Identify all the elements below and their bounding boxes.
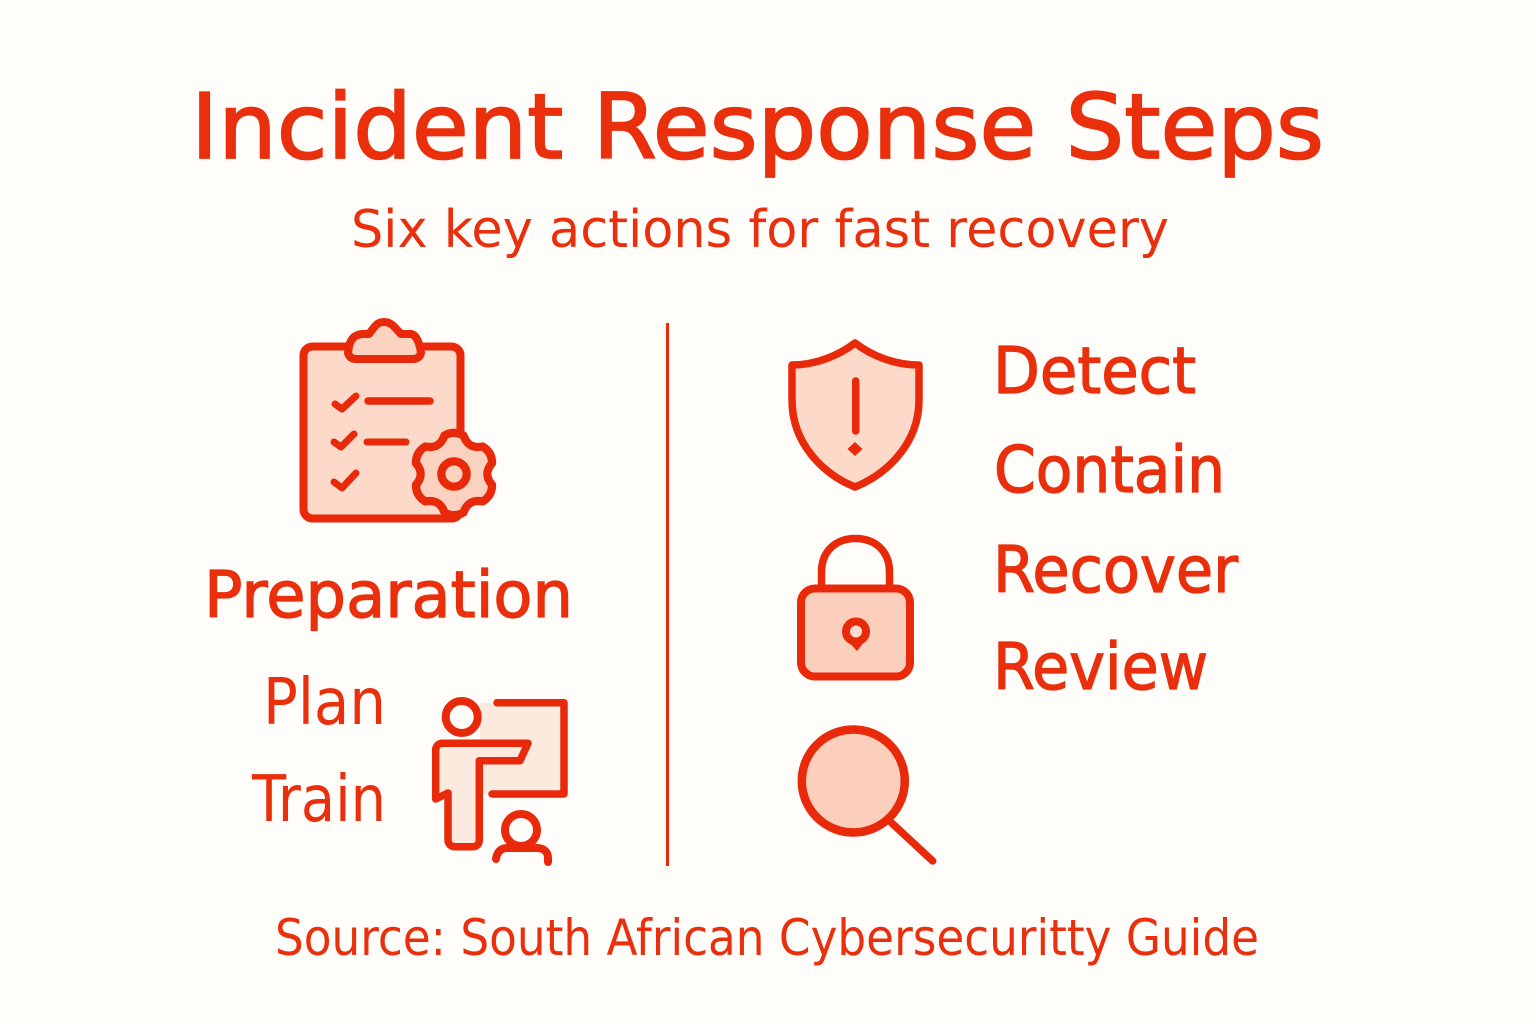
subtitle: Six key actions for fast recovery	[351, 200, 1169, 260]
label: detect: Detect	[993, 335, 1196, 409]
icon: clipboard with checklist and gear	[304, 322, 492, 518]
panel: response icons	[792, 335, 1239, 861]
title: Incident Response Steps	[191, 75, 1324, 180]
label: train: Train	[251, 763, 386, 837]
label: recover: Recover	[993, 534, 1239, 608]
icon: padlock	[801, 538, 910, 676]
divider	[666, 323, 669, 866]
icon: magnifying glass	[802, 730, 933, 861]
label: preparation: Preparation	[204, 559, 573, 633]
source line: Source: South African Cybersecuritty Guide	[275, 909, 1259, 967]
icon: shield with exclamation	[792, 343, 919, 487]
label: contain: Contain	[994, 434, 1225, 508]
label: plan: Plan	[263, 666, 386, 740]
label: review: Review	[993, 631, 1208, 705]
icon: trainer at presentation board with student	[436, 701, 564, 862]
panel: preparation	[204, 322, 573, 862]
